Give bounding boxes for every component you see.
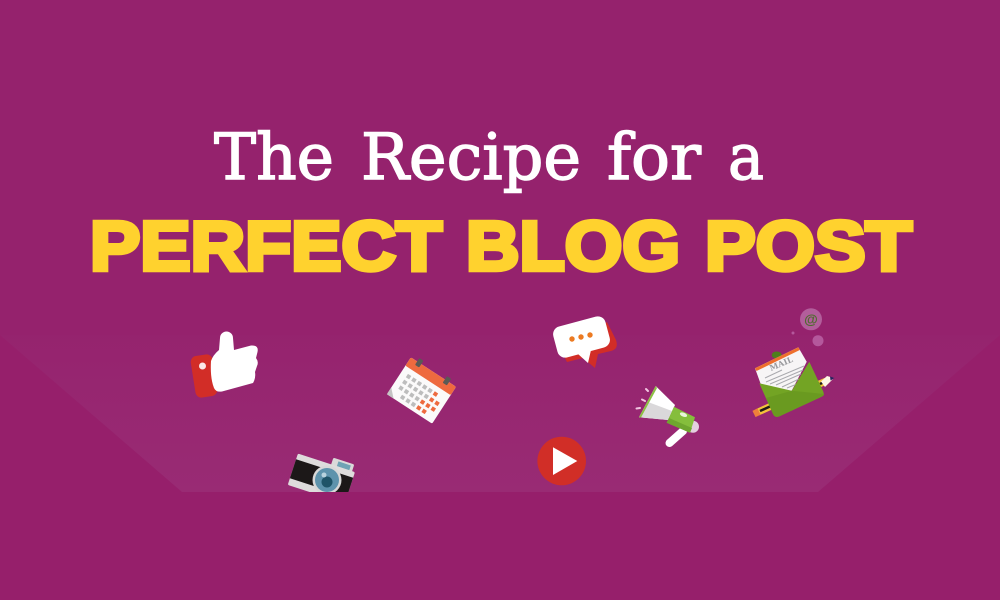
icon: speech bubble [551, 315, 617, 368]
title: PERFECT BLOG POST: BLOG [466, 207, 680, 285]
icon: mail envelope with pencil [754, 347, 834, 417]
icon: play button [537, 437, 586, 485]
title: PERFECT BLOG POST: PERFECT [90, 207, 442, 285]
icon: calendar [387, 354, 458, 424]
icon: thumbs up [190, 332, 258, 398]
title: The Recipe for a: The [214, 121, 334, 195]
title: PERFECT BLOG POST: POST [705, 207, 912, 285]
icon: camera [288, 454, 355, 492]
title: The Recipe for a: for [607, 121, 701, 195]
title: The Recipe for a: Recipe [361, 121, 581, 195]
icon: at sign bubble: @ [804, 311, 818, 327]
decorative bubbles [792, 332, 824, 346]
icon: megaphone [636, 386, 699, 443]
icon: at sign bubble [800, 308, 822, 330]
icon: mail envelope with pencil: MAIL [768, 354, 795, 373]
title: The Recipe for a: a [728, 121, 764, 195]
